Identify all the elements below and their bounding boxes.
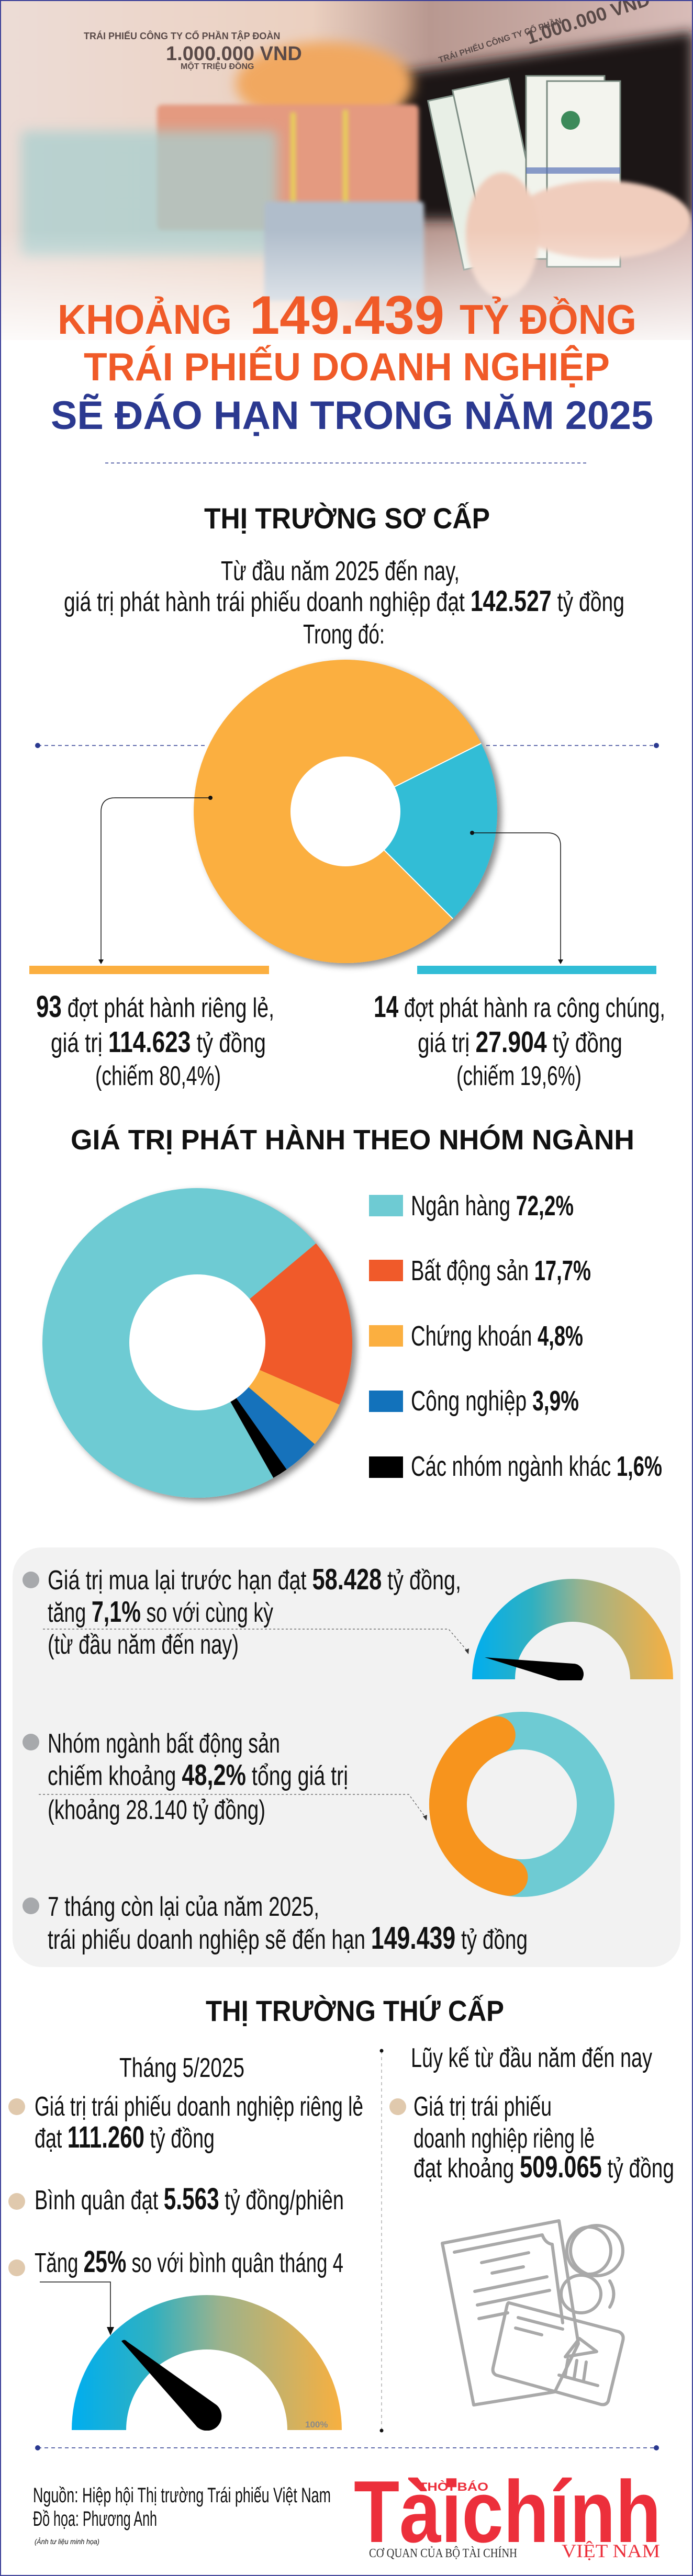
logo: Thoi bao Tai chinh Viet Nam: VIỆT NAM (562, 2540, 660, 2561)
dashed guides (38, 745, 656, 746)
column: year to date: doanh nghiệp riêng lẻ (413, 2123, 595, 2154)
column: May 2025: Giá trị trái phiếu doanh nghiệp riêng lẻ (35, 2092, 363, 2122)
column: year to date (389, 2043, 674, 2184)
hero photo: bonds, money stacks and dollar bills (0, 0, 693, 366)
gauge 1 (472, 1579, 673, 1685)
text: public issuance: giá trị 27.904 tỷ đồng (418, 1025, 622, 1059)
column: year to date: đạt khoảng 509.065 tỷ đồng (413, 2150, 674, 2184)
column: May 2025: Bình quân đạt 5.563 tỷ đồng/phiên (35, 2182, 344, 2216)
bullet: remaining maturity: 7 tháng còn lại của năm 2025, (48, 1892, 319, 1922)
column: May 2025: đạt 111.260 tỷ đồng (35, 2120, 215, 2154)
legend: Các nhóm ngành khác 1,6% (411, 1451, 662, 1482)
donut chart: sectors (42, 1188, 352, 1498)
bullet: real estate: (khoảng 28.140 tỷ đồng) (48, 1795, 265, 1825)
intro text: Trong đó: (303, 619, 385, 650)
legend: Ngân hàng 72,2% (411, 1190, 574, 1222)
gauge 2: 100% (305, 2420, 328, 2430)
bullet: early buyback (23, 1563, 461, 1660)
bullet: real estate: chiếm khoảng 48,2% tổng giá trị (48, 1758, 348, 1792)
connectors (101, 798, 561, 962)
panel: highlights (13, 1547, 680, 1967)
title: SẼ ĐÁO HẠN TRONG NĂM 2025 (51, 393, 653, 438)
source and credits: (Ảnh tư liệu minh họa) (35, 2537, 99, 2546)
legend: Công nghiệp 3,9% (411, 1385, 579, 1417)
bullet: real estate (23, 1728, 348, 1825)
hero photo: bonds, money stacks and dollar bills: MỘT TRIỆU ĐỒNG (181, 61, 254, 71)
column: May 2025: Tháng 5/2025 (119, 2053, 244, 2083)
legend: Bất động sản 17,7% (411, 1255, 591, 1286)
bullet: remaining maturity (23, 1892, 528, 1956)
title: TRÁI PHIẾU DOANH NGHIỆP (84, 345, 610, 389)
intro text: Từ đầu năm 2025 đến nay, (221, 556, 460, 586)
text: private issuance: 93 đợt phát hành riêng lẻ, (36, 990, 274, 1024)
title: 149.439 (250, 285, 444, 346)
legend: Chứng khoán 4,8% (411, 1320, 583, 1352)
ring chart (448, 1731, 596, 1878)
bullet: early buyback: Giá trị mua lại trước hạn đạt 58.428 tỷ đồng, (48, 1563, 461, 1596)
logo: Thoi bao Tai chinh Viet Nam: CƠ QUAN CỦA BỘ TÀI CHÍNH (369, 2546, 517, 2560)
text: public issuance (374, 990, 665, 1091)
source and credits (33, 2484, 331, 2546)
icon: bond document with coins and bank card (442, 2221, 623, 2405)
heading: thi truong so cap: THỊ TRƯỜNG SƠ CẤP (204, 502, 490, 535)
source and credits: Đồ họa: Phương Anh (33, 2507, 157, 2530)
legend (369, 1190, 662, 1482)
text: public issuance: (chiếm 19,6%) (456, 1061, 582, 1091)
column: May 2025: Tăng 25% so với bình quân tháng 4 (35, 2245, 343, 2279)
text: private issuance: giá trị 114.623 tỷ đồng (51, 1025, 266, 1059)
bullet: remaining maturity: trái phiếu doanh nghiệp sẽ đến hạn 149.439 tỷ đồng (48, 1920, 528, 1956)
bars (29, 966, 269, 974)
text: private issuance: (chiếm 80,4%) (95, 1061, 221, 1091)
source and credits: Nguồn: Hiệp hội Thị trường Trái phiếu Việt Nam (33, 2484, 331, 2507)
gauge 2 (72, 2295, 342, 2431)
title (51, 285, 653, 438)
title: TỶ ĐỒNG (460, 296, 636, 343)
intro text: giá trị phát hành trái phiếu doanh nghiệp đạt 142.527 tỷ đồng (64, 584, 624, 618)
text: private issuance (36, 990, 274, 1091)
heading: thi truong thu cap: THỊ TRƯỜNG THỨ CẤP (206, 1994, 504, 2027)
column: year to date: Giá trị trái phiếu (413, 2092, 552, 2122)
bullet: early buyback: tăng 7,1% so với cùng kỳ (48, 1595, 273, 1629)
intro text (64, 556, 624, 650)
column: May 2025 (8, 2053, 363, 2279)
bullet: early buyback: (từ đầu năm đến nay) (48, 1630, 239, 1660)
hero photo: bonds, money stacks and dollar bills: TRÁI PHIẾU CÔNG TY CỔ PHẦN (437, 16, 563, 65)
donut chart: primary market (194, 660, 497, 963)
hero photo: bonds, money stacks and dollar bills: 1.000.000 VND (166, 43, 302, 65)
heading: by sector: GIÁ TRỊ PHÁT HÀNH THEO NHÓM NGÀNH (71, 1124, 634, 1156)
title: KHOẢNG (58, 296, 232, 343)
arrow to gauge (40, 2282, 114, 2335)
logo: Thoi bao Tai chinh Viet Nam: THỜI BÁO (419, 2480, 488, 2493)
hero photo: bonds, money stacks and dollar bills: TRÁI PHIẾU CÔNG TY CỔ PHẦN TẬP ĐOÀN (84, 30, 280, 41)
bullet: real estate: Nhóm ngành bất động sản (48, 1728, 280, 1759)
